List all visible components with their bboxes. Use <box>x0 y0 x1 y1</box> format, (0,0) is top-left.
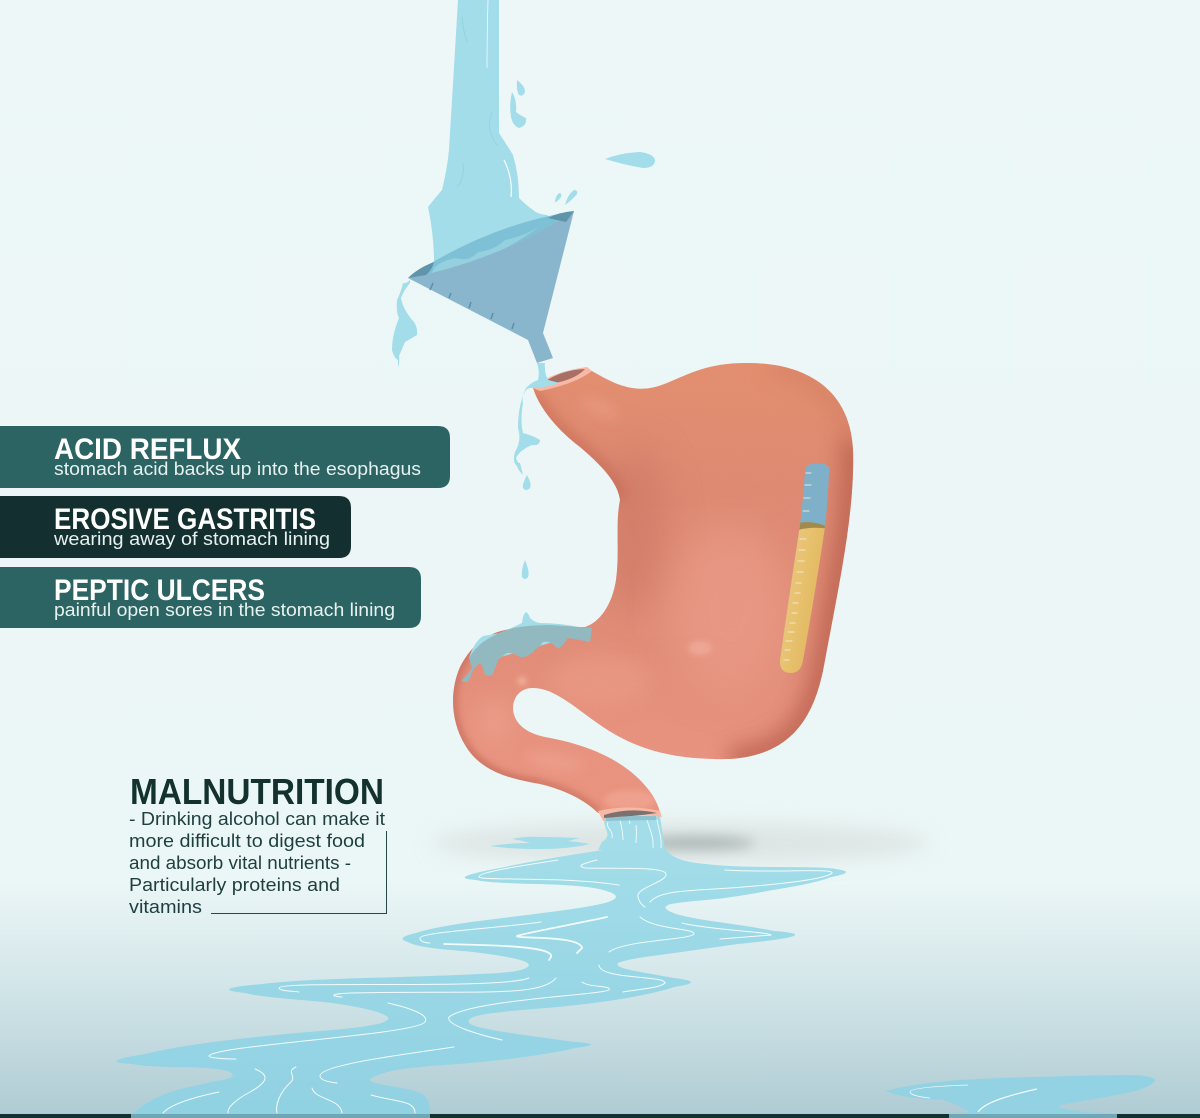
panel: erosive gastritis <box>0 496 351 558</box>
text: peptic ulcers description: painful open sores in the stomach lining <box>54 599 395 620</box>
text: acid reflux description: stomach acid backs up into the esophagus <box>54 458 421 479</box>
water drips and droplets <box>392 80 655 579</box>
right puddle <box>886 1075 1155 1118</box>
panel: peptic ulcers <box>0 567 421 628</box>
water river <box>116 845 846 1118</box>
panel: malnutrition <box>129 771 386 917</box>
heading: acid reflux: ACID REFLUX <box>54 433 241 466</box>
water on pylorus <box>462 612 592 682</box>
text: erosive gastritis description: wearing away of stomach lining <box>53 528 330 549</box>
bottom dark bar <box>0 1114 1200 1118</box>
small puddle <box>490 837 590 849</box>
esophagus opening <box>533 367 592 391</box>
pylorus opening <box>598 808 662 821</box>
heading: erosive gastritis: EROSIVE GASTRITIS <box>54 503 316 536</box>
heading: peptic ulcers: PEPTIC ULCERS <box>54 574 265 607</box>
water stream from top <box>428 0 560 285</box>
text: malnutrition description: - Drinking alcohol can make it <box>129 808 385 829</box>
funnel <box>408 211 574 363</box>
text: malnutrition description <box>129 808 385 917</box>
stomach <box>440 355 860 820</box>
ground shadow <box>430 823 930 863</box>
panel: acid reflux <box>0 426 450 488</box>
text: malnutrition description: and absorb vital nutrients - <box>129 852 351 873</box>
test tube gauge <box>780 464 830 673</box>
water pouring out of pylorus <box>598 816 665 850</box>
text: malnutrition description: more difficult to digest food <box>129 830 365 851</box>
text: malnutrition description: Particularly proteins and <box>129 874 340 895</box>
text: malnutrition description: vitamins <box>129 896 202 917</box>
heading: malnutrition: MALNUTRITION <box>130 771 384 812</box>
